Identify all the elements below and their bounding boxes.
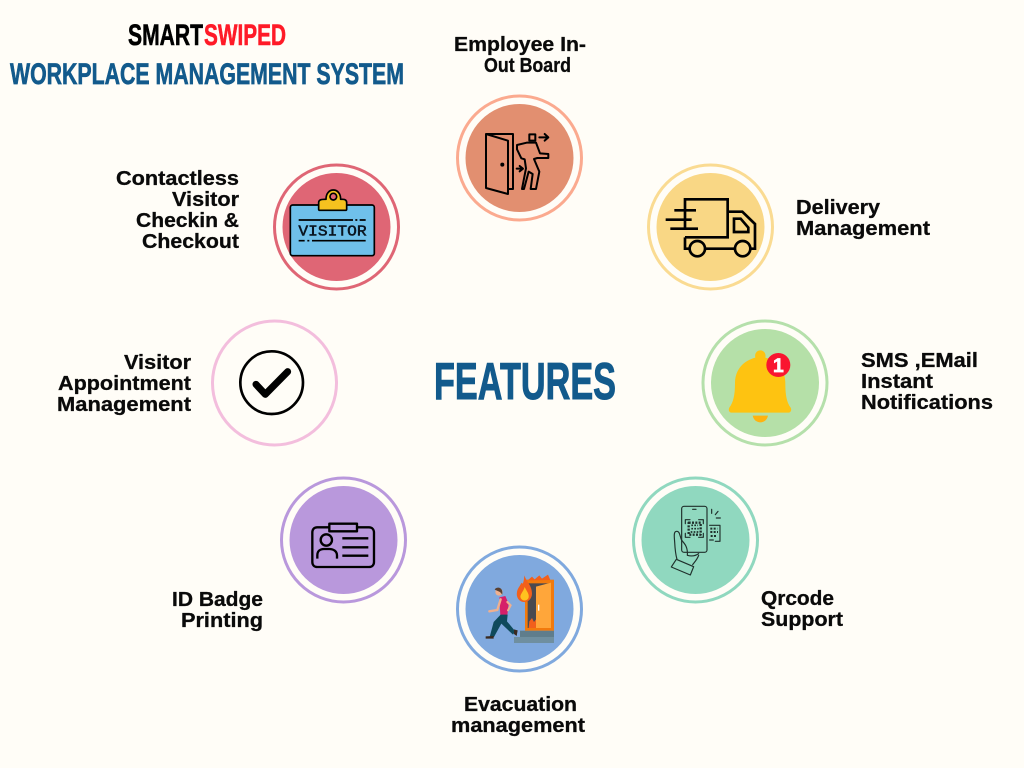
label: Evacuation management: management — [451, 714, 585, 737]
icon: visitor badge: VISITOR — [298, 224, 367, 240]
label: Qrcode Support: Support — [761, 608, 843, 631]
feature: Contactless Visitor Checkin & Checkout — [274, 165, 398, 289]
label: Contactless Visitor Checkin & Checkout: Checkout — [142, 230, 239, 253]
label: Visitor Appointment Management: Appointment — [58, 372, 191, 395]
feature: Employee In-Out Board — [458, 96, 582, 220]
feature: ID Badge Printing — [282, 478, 406, 602]
title: SmartSwiped: SMART — [128, 19, 203, 52]
label: ID Badge Printing: Printing — [181, 609, 263, 632]
title: SmartSwiped — [128, 19, 286, 52]
icon: notification bell: 1 — [773, 356, 784, 377]
label: Visitor Appointment Management: Visitor — [124, 351, 191, 374]
label: Contactless Visitor Checkin & Checkout: Visitor — [172, 188, 239, 211]
icon: check mark in circle — [240, 351, 303, 414]
icon: person running from burning door — [486, 575, 554, 643]
feature: Evacuation management — [458, 547, 582, 671]
label: Delivery Management: Management — [796, 217, 930, 240]
label: Employee In-Out Board: Out Board — [484, 54, 571, 77]
icon: hand holding phone with QR code — [671, 506, 720, 575]
heading: Features: FEATURES — [434, 353, 616, 411]
label: Visitor Appointment Management — [57, 351, 191, 416]
label: Evacuation management — [451, 693, 585, 737]
label: ID Badge Printing: ID Badge — [172, 588, 263, 611]
feature: Qrcode Support — [634, 478, 758, 602]
feature: Delivery Management — [648, 165, 772, 289]
feature: SMS, Email Instant Notifications — [703, 321, 827, 445]
label: Evacuation management: Evacuation — [464, 693, 577, 716]
label: Contactless Visitor Checkin & Checkout: Checkin & — [136, 209, 239, 232]
label: Qrcode Support — [761, 587, 843, 631]
label: ID Badge Printing — [172, 588, 263, 632]
label: SMS, Email Instant Notifications: SMS ,EMail — [861, 349, 978, 372]
label: Qrcode Support: Qrcode — [761, 587, 834, 610]
feature: Visitor Appointment Management — [212, 321, 336, 445]
label: Delivery Management: Delivery — [796, 196, 881, 219]
icon: delivery truck — [666, 199, 755, 256]
icon: ID badge — [312, 524, 374, 567]
label: Contactless Visitor Checkin & Checkout — [116, 167, 239, 253]
subtitle: Workplace Management System: WORKPLACE MANAGEMENT SYSTEM — [10, 58, 404, 91]
label: SMS, Email Instant Notifications: Instant — [861, 370, 933, 393]
label: Delivery Management — [796, 196, 930, 240]
label: SMS, Email Instant Notifications — [861, 349, 993, 414]
label: Contactless Visitor Checkin & Checkout: Contactless — [116, 167, 239, 190]
label: Visitor Appointment Management: Management — [57, 393, 191, 416]
title: SmartSwiped: SWIPED — [204, 19, 286, 52]
label: SMS, Email Instant Notifications: Notifications — [861, 391, 993, 414]
label: Employee In-Out Board: Employee In- — [454, 33, 586, 56]
label: Employee In-Out Board — [454, 33, 586, 77]
icon: door and person exiting — [486, 134, 548, 194]
